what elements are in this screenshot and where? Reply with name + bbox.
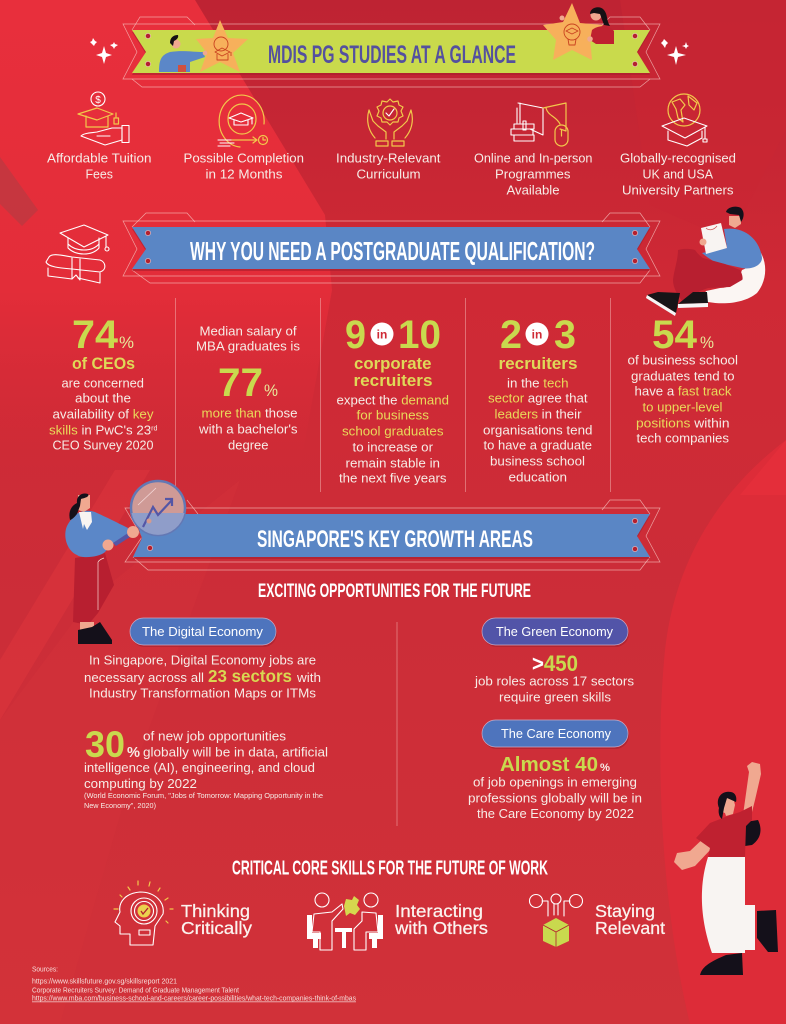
icon: people at a table with puzzle piece [307, 893, 383, 950]
statistic: 74% of CEOs: CEO Survey 2020 [52, 438, 154, 452]
statistic: 9 in 10 corporate recruiters: in [377, 328, 387, 342]
statistic: 77% median salary: with a bachelor's [198, 422, 298, 436]
skill: staying relevant: Staying [595, 901, 655, 921]
heading: growth areas: SINGAPORE'S KEY GROWTH AREAS [257, 526, 533, 553]
icon: university partners [662, 94, 707, 146]
sources: https://www.skillsfuture.gov.sg/skillsreport 2021 [32, 978, 177, 986]
icon: affordable tuition: $ [95, 95, 101, 106]
statistic: 9 in 10 corporate recruiters: school graduates [342, 424, 444, 438]
skill: staying relevant [530, 894, 665, 947]
statistic: 30% new job opportunities: intelligence (AI), engineering, and cloud [84, 760, 315, 775]
statistic: 9 in 10 corporate recruiters: corporate [354, 354, 432, 373]
statistic: 54% business school graduates: to upper-level [642, 400, 723, 414]
statistic: 2 in 3 recruiters: education [508, 470, 567, 484]
statistic: 30% new job opportunities: % [127, 744, 140, 761]
label: curriculum: Industry-Relevant [336, 150, 441, 166]
statistic: 9 in 10 corporate recruiters: the next five years [339, 470, 447, 486]
statistic: 9 in 10 corporate recruiters: to increase or [352, 440, 434, 454]
statistic: almost 40% care economy: Almost 40 [500, 754, 598, 776]
statistic: 54% business school graduates: % [700, 333, 714, 352]
pill: the green economy: The Green Economy [496, 624, 613, 639]
label: completion [184, 150, 304, 182]
statistic: 74% of CEOs: of CEOs [72, 354, 135, 373]
skill: thinking critically [114, 881, 252, 945]
text: digital economy sectors [84, 652, 321, 700]
feature row: five programme benefits [47, 92, 736, 198]
statistic: over 450 job roles: require green skills [499, 690, 612, 704]
statistic: 30% new job opportunities: (World Economic Forum, "Jobs of Tomorrow: Mapping Opportunity in the [84, 791, 323, 800]
label: completion: Possible Completion [184, 150, 304, 166]
statistic: 54% business school graduates: of business school [628, 352, 738, 368]
statistic: 74% of CEOs: about the [75, 390, 131, 406]
statistic: 2 in 3 recruiters: sector agree that [488, 390, 588, 406]
statistic: over 450 job roles: job roles across 17 sectors [474, 674, 635, 688]
statistic: 9 in 10 corporate recruiters: for business [356, 408, 430, 422]
sources: Corporate Recruiters Survey: Demand of Graduate Management Talent [32, 988, 239, 994]
statistic: 77% median salary: degree [228, 438, 268, 452]
skill: interacting with others [307, 893, 488, 950]
statistic: 30% new job opportunities: 30 [85, 724, 125, 765]
pill: the care economy: The Care Economy [501, 726, 611, 741]
icon: industry-relevant curriculum [368, 99, 412, 146]
icon: affordable tuition [78, 92, 129, 145]
statistic: 9 in 10 corporate recruiters: 10 [398, 313, 441, 357]
statistic: almost 40% care economy: professions globally will be in [468, 790, 642, 806]
text: digital economy sectors: with [296, 670, 321, 685]
label: completion: in 12 Months [206, 166, 283, 182]
statistic: 54% business school graduates: 54 [652, 313, 698, 357]
subheading: critical core skills: CRITICAL CORE SKILLS FOR THE FUTURE OF WORK [232, 858, 548, 880]
label: affordable tuition: Fees [86, 166, 113, 182]
statistic: 2 in 3 recruiters: organisations tend [483, 422, 592, 438]
subheading: exciting opportunities: EXCITING OPPORTUNITIES FOR THE FUTURE [258, 580, 531, 602]
label: university partners [620, 150, 736, 198]
label: online and in-person: Available [506, 182, 560, 198]
icon: magnifying glass [131, 481, 185, 535]
statistic: 2 in 3 recruiters: to have a graduate [484, 438, 592, 452]
person: reading on bean bag [646, 207, 765, 316]
statistic: 30% new job opportunities: of new job opportunities [143, 728, 287, 744]
icon: right sparkles [661, 39, 689, 65]
person: woman waving [674, 762, 778, 975]
statistic: 74% of CEOs: skills in PwC's 23 [49, 422, 150, 438]
statistic: 2 in 3 recruiters: in [532, 328, 542, 342]
statistic: 9 in 10 corporate recruiters: remain stable in [346, 456, 440, 470]
label: affordable tuition: Affordable Tuition [47, 150, 152, 166]
text: digital economy sectors: Industry Transformation Maps or ITMs [89, 686, 317, 700]
statistic: 2 in 3 recruiters: leaders in their [494, 406, 582, 422]
statistic: 9 in 10 corporate recruiters: 9 [345, 313, 366, 357]
label: online and in-person [474, 150, 592, 198]
icon: head with lightbulb [114, 881, 173, 945]
person: woman with magnifying glass [65, 481, 185, 644]
pill: the care economy [482, 720, 629, 749]
statistic: 54% business school graduates [628, 313, 738, 446]
statistic: 77% median salary: more than those [202, 406, 298, 420]
statistic: 74% of CEOs [49, 313, 158, 452]
label: curriculum [336, 150, 441, 182]
sources [32, 966, 356, 1002]
statistic: 74% of CEOs: % [119, 333, 134, 352]
statistic: 30% new job opportunities: computing by 2022 [84, 776, 197, 791]
statistic: 74% of CEOs: are concerned [62, 376, 144, 390]
skill: interacting with others: with Others [394, 918, 488, 938]
statistic: 54% business school graduates: positions within [636, 416, 730, 430]
statistic: 77% median salary: MBA graduates is [196, 338, 301, 354]
pill: the digital economy [130, 618, 277, 647]
label: affordable tuition [47, 150, 152, 182]
pill: the green economy [482, 618, 629, 647]
statistic: 30% new job opportunities: globally will be in data, artificial [143, 744, 328, 760]
statistic: over 450 job roles [474, 651, 635, 704]
icon: graduation cap and diploma [46, 225, 109, 283]
statistic: 2 in 3 recruiters: recruiters [498, 354, 578, 373]
statistic: 9 in 10 corporate recruiters: expect the demand [336, 392, 449, 408]
banner: Singapore's key growth areas [125, 500, 660, 570]
banner: MDIS PG Studies at a Glance [123, 17, 660, 87]
skill: thinking critically: Thinking [181, 901, 250, 921]
text: digital economy sectors: 23 sectors [208, 666, 292, 686]
statistic: 77% median salary [196, 324, 301, 452]
statistic: almost 40% care economy: the Care Economy by 2022 [477, 806, 634, 821]
banner: Why you need a postgraduate qualification [123, 213, 660, 283]
statistic: 74% of CEOs: availability of key [52, 406, 154, 422]
statistic: almost 40% care economy: % [600, 762, 610, 774]
statistic: over 450 job roles: >450 [532, 651, 578, 676]
statistic: 77% median salary: 77 [218, 361, 263, 405]
statistic: 9 in 10 corporate recruiters [336, 313, 449, 486]
heading: at a glance: MDIS PG STUDIES AT A GLANCE [268, 41, 516, 69]
statistic: 2 in 3 recruiters [483, 313, 592, 484]
statistic: almost 40% care economy [468, 754, 642, 821]
statistic: 54% business school graduates: have a fast track [634, 384, 732, 398]
text: digital economy sectors: necessary across all [84, 670, 204, 685]
label: university partners: University Partners [622, 182, 734, 198]
sources: https://www.mba.com/business-school-and-careers/career-possibilities/what-tech-companies-think-of-mbas [32, 996, 356, 1002]
icon: completion in 12 months [218, 95, 268, 147]
sources: Sources: [32, 966, 58, 974]
statistic: 74% of CEOs: rd [151, 426, 158, 432]
text: digital economy sectors: In Singapore, Digital Economy jobs are [89, 652, 316, 668]
icon: online and in-person [511, 103, 568, 146]
skill: staying relevant: Relevant [595, 918, 665, 938]
label: online and in-person: Online and In-person [474, 150, 592, 166]
icon: left sparkles [90, 38, 118, 64]
statistic: 2 in 3 recruiters: in the tech [507, 376, 568, 390]
statistic: 2 in 3 recruiters: 3 [554, 313, 576, 357]
pill: the digital economy: The Digital Economy [142, 624, 263, 639]
statistic: 74% of CEOs: 74 [72, 313, 119, 357]
skill: interacting with others: Interacting [395, 901, 483, 921]
label: online and in-person: Programmes [495, 166, 571, 182]
statistic: almost 40% care economy: of job openings in emerging [473, 774, 637, 790]
label: university partners: UK and USA [642, 166, 713, 182]
divider between economies [396, 622, 398, 826]
skill: thinking critically: Critically [181, 918, 252, 938]
statistic: 9 in 10 corporate recruiters: recruiters [354, 371, 432, 390]
icon: left star with person [159, 20, 248, 72]
icon: right star with person [543, 3, 614, 60]
icon: cube with nodes [530, 894, 582, 947]
label: university partners: Globally-recognised [620, 150, 736, 166]
divider lines between statistics [176, 298, 610, 492]
statistic: 2 in 3 recruiters: business school [490, 454, 585, 468]
statistic: 30% new job opportunities [84, 724, 328, 810]
statistic: 2 in 3 recruiters: 2 [500, 313, 522, 357]
statistic: 77% median salary: Median salary of [200, 324, 297, 338]
statistic: 30% new job opportunities: New Economy", 2020) [84, 801, 156, 810]
statistic: 54% business school graduates: graduates tend to [631, 368, 734, 384]
statistic: 54% business school graduates: tech companies [636, 430, 729, 446]
statistic: 77% median salary: % [264, 381, 278, 400]
label: curriculum: Curriculum [356, 166, 420, 182]
